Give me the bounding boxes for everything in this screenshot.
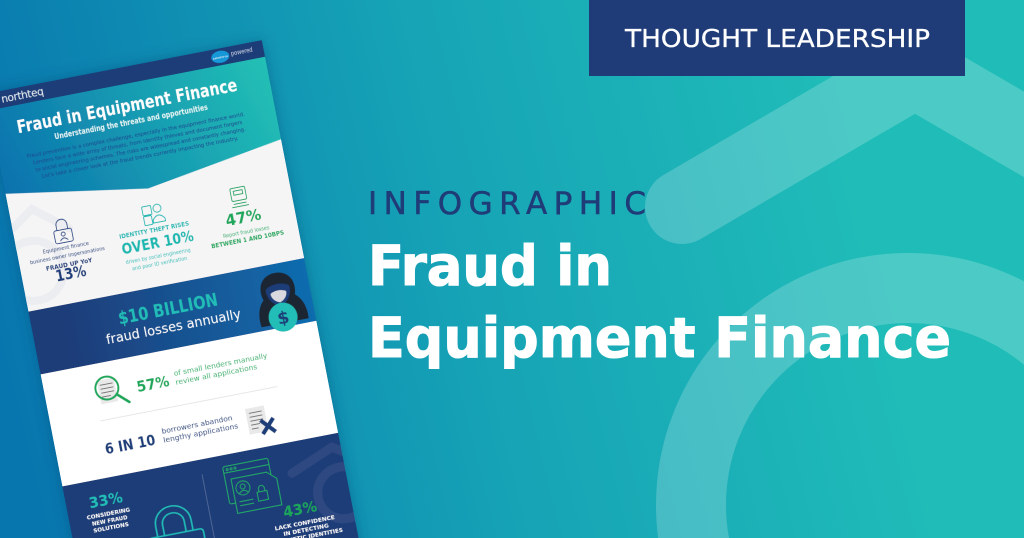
stat: abandoned applications: 6 IN 10	[103, 431, 157, 458]
stat: synthetic identities: LACK CONFIDENCE	[274, 515, 336, 533]
intro paragraph	[26, 112, 250, 182]
stat: new fraud solutions: SOLUTIONS	[93, 522, 130, 535]
icon: monitor	[229, 186, 249, 208]
tilted infographic page	[0, 40, 358, 538]
icon: rejected document	[245, 404, 276, 437]
stat: new fraud solutions	[86, 492, 130, 533]
stat: abandoned applications: lengthy applications	[163, 422, 239, 445]
icon: magnifier over document	[94, 375, 131, 404]
page subtitle: Understanding the threats and opportunities	[54, 103, 209, 141]
powered label: powered	[230, 47, 253, 58]
stat: fraud losses: Report fraud losses	[223, 225, 270, 240]
stat: fraud losses	[211, 186, 284, 248]
stat: new fraud solutions: CONSIDERING	[86, 507, 131, 522]
intro paragraph: Fraud prevention is a complex challenge, especially in the equipment finance world.	[26, 112, 246, 160]
decorative house chevron	[682, 71, 1024, 207]
stat: manual review: review all applications	[175, 363, 258, 387]
eyebrow: infographic: INFOGRAPHIC	[368, 186, 646, 222]
stat: fraud losses: 47%	[224, 205, 263, 230]
icon: identity people	[141, 203, 166, 226]
stat: synthetic identities: IN DETECTING	[283, 523, 330, 538]
stat: manual review: of small lenders manually	[173, 352, 268, 378]
logo: northteq: northteq	[0, 86, 45, 106]
icon: hooded hacker with dollar coin: $	[276, 308, 291, 330]
panel: header	[0, 56, 281, 194]
stat: impersonation fraud: business owner impersonations	[30, 246, 106, 266]
panel: bottom navy section	[62, 432, 358, 538]
panel: white review section	[41, 321, 338, 486]
intro paragraph: Let's take a closer look at the fraud trends currently impacting the industry.	[41, 136, 239, 180]
page shadow	[0, 40, 380, 538]
stat: impersonation fraud	[30, 218, 105, 282]
icon: salesforce cloud	[211, 50, 230, 64]
stat: synthetic identities	[274, 500, 343, 538]
stat: identity theft	[119, 204, 194, 270]
decorative arc	[691, 288, 1024, 538]
stat: abandoned applications: borrowers abandon	[161, 414, 233, 436]
stat: impersonation fraud: Equipment finance	[42, 241, 90, 256]
icon: salesforce cloud: salesforce	[213, 54, 228, 61]
icon: hooded hacker with dollar coin	[259, 272, 309, 332]
category tag: THOUGHT LEADERSHIP	[624, 24, 930, 53]
ghost house watermark	[11, 204, 73, 304]
panel: page base	[6, 139, 304, 312]
ghost house watermark	[288, 442, 356, 524]
stat: new fraud solutions: NEW FRAUD	[92, 515, 129, 528]
stat: identity theft: and poor ID verification	[132, 256, 188, 272]
main title: Equipment Finance	[368, 306, 951, 370]
panel: top navy bar	[0, 40, 265, 110]
intro paragraph: Lenders face a wide array of threats, from identity thieves and document forgers	[33, 120, 243, 166]
stat: manual review: 57%	[135, 372, 171, 396]
category tag	[589, 0, 965, 76]
stat: impersonation fraud: 13%	[54, 261, 88, 286]
stat: identity theft: OVER 10%	[120, 227, 195, 258]
stat: fraud losses: BETWEEN 1 AND 10BPS	[211, 229, 285, 250]
icon: padlock	[150, 504, 206, 538]
stat: abandoned applications	[105, 406, 277, 454]
intro paragraph: to social engineering schemes. The risks are widespread and constantly changing.	[35, 127, 246, 174]
main title	[368, 234, 951, 370]
stat: impersonation fraud: FRAUD UP YoY	[45, 256, 93, 273]
icon: browser identity window	[223, 457, 282, 515]
main title: Fraud in	[368, 234, 612, 298]
page title: Fraud in Equipment Finance	[15, 75, 239, 138]
stat: new fraud solutions: 33%	[87, 488, 124, 512]
subhead: fraud losses annually	[105, 306, 242, 348]
panel: fraud losses band	[28, 258, 316, 374]
stat: identity theft: driven by social engineering	[125, 248, 191, 266]
icon: padlock person	[52, 218, 74, 244]
headline: $10 billion: $10 BILLION	[116, 289, 220, 329]
stat: identity theft: IDENTITY THEFT RISES	[119, 219, 190, 241]
stat: manual review	[94, 353, 267, 404]
stat: synthetic identities: 43%	[282, 497, 318, 521]
